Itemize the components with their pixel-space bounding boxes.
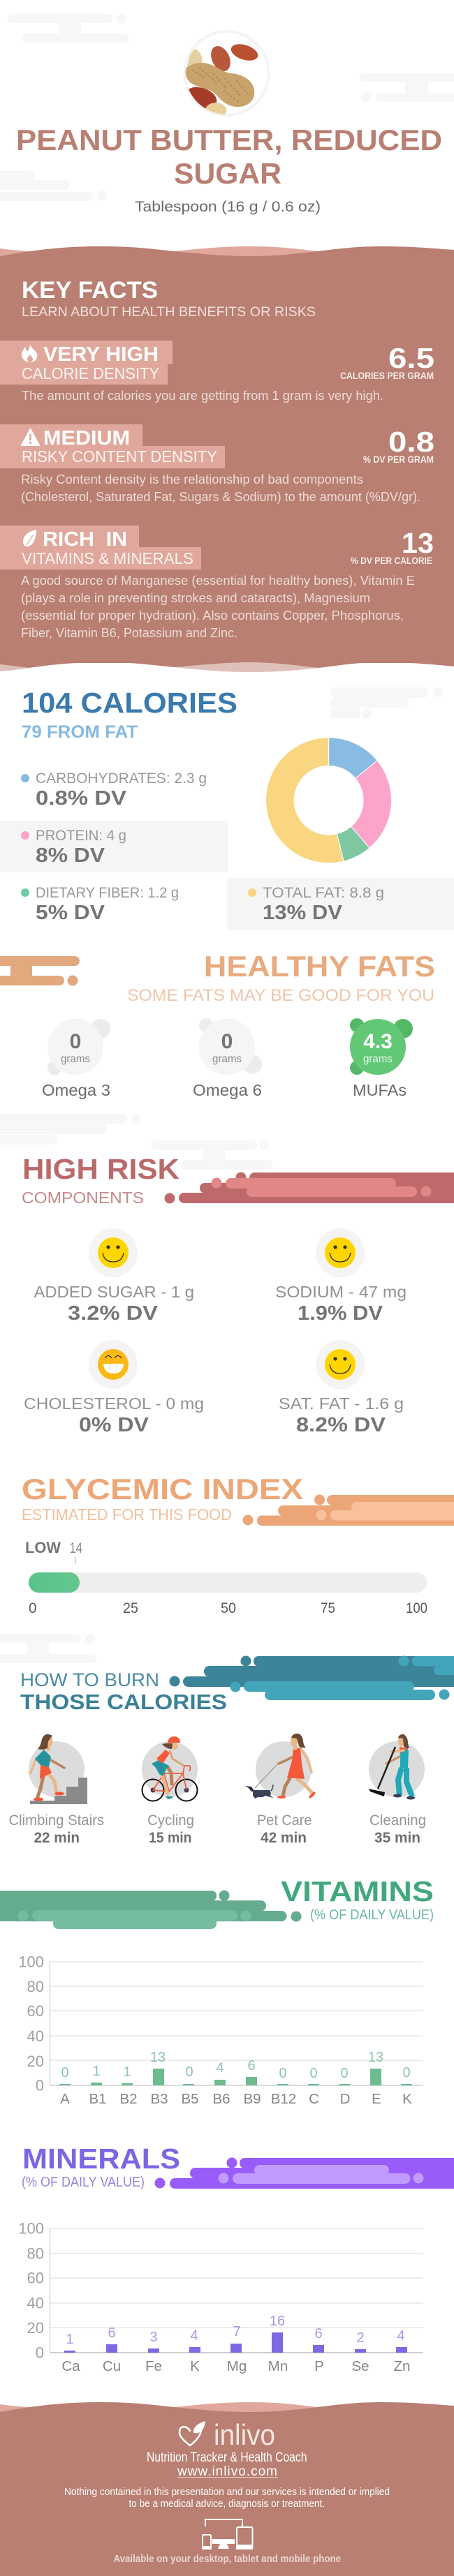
chart: vitamins bar chart: 0	[340, 2066, 349, 2081]
chart: vitamins bar chart: 0	[279, 2066, 287, 2081]
chart: minerals bar chart: P	[314, 2358, 324, 2374]
icon: leaf	[23, 530, 36, 546]
label: VITAMINS & MINERALS	[22, 549, 193, 567]
item: sodium	[275, 1228, 407, 1325]
legend: carbohydrates	[21, 770, 207, 810]
chart: minerals bar chart: 40	[27, 2295, 44, 2311]
chart: minerals bar chart: Mn	[268, 2358, 288, 2374]
chart: vitamins bar chart: 100	[18, 1953, 44, 1971]
chart: vitamins bar chart: 1	[92, 2064, 101, 2079]
panel: footer	[0, 2402, 454, 2576]
panel: high risk components	[22, 1153, 454, 1436]
heading: how to burn: HOW TO BURN	[20, 1669, 159, 1690]
gauge: glycemic index bar	[29, 1556, 427, 1593]
icon: smiley	[325, 1349, 356, 1380]
gauge scale: 25	[123, 1600, 138, 1616]
chart: vitamins bar chart: A	[60, 2091, 70, 2107]
description: (plays a role in preventing strokes and cataracts), Magnesium	[21, 590, 370, 605]
chart: minerals bar chart: Cu	[103, 2358, 121, 2374]
item: cholesterol: CHOLESTEROL - 0 mg	[24, 1394, 204, 1413]
header: food title and image	[16, 31, 442, 215]
value: 6.5	[388, 342, 434, 374]
description: (Cholesterol, Saturated Fat, Sugars & Sodium) to the amount (%DV/gr).	[21, 489, 420, 504]
chart: vitamins bar chart: B12	[271, 2091, 296, 2107]
activity: cleaning	[369, 1734, 426, 1846]
gauge scale: 100	[406, 1600, 427, 1616]
stat: omega 6: Omega 6	[193, 1081, 262, 1099]
legend: total fat: TOTAL FAT: 8.8 g	[263, 885, 384, 901]
chart: minerals bar chart: Se	[351, 2358, 369, 2374]
chart: minerals bar chart: Ca	[61, 2358, 80, 2374]
icon: woman climbing stairs	[30, 1734, 87, 1804]
chart: minerals bar chart: 100	[18, 2219, 44, 2238]
chart: minerals bar chart: 4	[397, 2328, 405, 2344]
disclaimer: Nothing contained in this presentation and our services is intended or implied	[64, 2486, 390, 2498]
chart: vitamins bar chart: 80	[27, 1978, 44, 1995]
tagline: Nutrition Tracker & Health Coach	[147, 2450, 307, 2465]
chart: vitamins bar chart: B6	[212, 2091, 230, 2107]
value: 14: 14	[70, 1540, 82, 1556]
icon: woman walking dog	[245, 1734, 316, 1799]
panel: calories	[0, 687, 454, 930]
title: PEANUT BUTTER, REDUCED	[16, 124, 442, 156]
activity: cleaning: 35 min	[374, 1830, 420, 1846]
stat: omega 3: grams	[61, 1053, 90, 1065]
decoration: red stripes	[165, 1172, 454, 1203]
subheading: components: COMPONENTS	[22, 1189, 144, 1207]
chart: vitamins bar chart: 0	[402, 2065, 411, 2080]
stat: omega 6: 0	[221, 1030, 233, 1053]
label: RISKY CONTENT DENSITY	[22, 447, 217, 466]
fact: calorie density	[0, 341, 434, 403]
logo: inlivo: inlivo	[214, 2418, 275, 2451]
fact: risky content density	[0, 424, 434, 504]
item: added sugar	[34, 1228, 194, 1325]
chart: vitamins bar chart: 0	[61, 2065, 69, 2080]
chart: minerals bar chart: 16	[270, 2314, 285, 2329]
icon: peanut photo in ring	[183, 31, 268, 118]
chart: vitamins bar chart: 4	[216, 2060, 224, 2076]
activity: pet care: Pet Care	[257, 1812, 312, 1829]
chart: vitamins bar chart: 13	[368, 2050, 383, 2065]
decoration: teal stripes	[169, 1655, 454, 1700]
chart: minerals bar chart: 6	[314, 2326, 323, 2342]
panel: minerals	[18, 2143, 454, 2374]
legend: dietary fiber	[21, 885, 179, 924]
chart: minerals bar chart: Fe	[145, 2358, 162, 2374]
legend: protein	[0, 821, 228, 872]
heading: those calories: THOSE CALORIES	[20, 1690, 227, 1714]
chart: vitamins bar chart: 13	[150, 2050, 166, 2065]
stat: mufas: grams	[363, 1053, 393, 1065]
panel: how to burn those calories	[8, 1655, 454, 1846]
stat: omega 3	[42, 1019, 110, 1099]
item: cholesterol	[24, 1340, 204, 1436]
chart: minerals bar chart: 3	[149, 2330, 158, 2345]
heading: glycemic index: GLYCEMIC INDEX	[22, 1473, 303, 1505]
gauge scale: 75	[321, 1600, 335, 1616]
subheading: SOME FATS MAY BE GOOD FOR YOU	[127, 986, 434, 1005]
heading: 104 calories: 104 CALORIES	[22, 687, 237, 719]
availability note: Available on your desktop, tablet and mobile phone	[113, 2554, 341, 2565]
activity: cleaning: Cleaning	[369, 1812, 426, 1829]
unit: % DV PER GRAM	[363, 454, 434, 465]
activity: pet care	[245, 1734, 316, 1846]
panel: key facts	[0, 246, 454, 672]
activity: pet care: 42 min	[261, 1830, 307, 1846]
activity: climbing stairs: 22 min	[34, 1830, 80, 1846]
fact: rich in vitamins and minerals	[0, 526, 434, 640]
chart: vitamins bar chart: 1	[123, 2064, 131, 2080]
activity: cycling: 15 min	[149, 1830, 191, 1846]
unit: CALORIES PER GRAM	[340, 371, 434, 381]
panel: vitamins	[0, 1875, 434, 2107]
heading: vitamins: VITAMINS	[281, 1875, 434, 1907]
decoration: purple stripes	[155, 2158, 454, 2189]
chart: minerals bar chart: 0	[36, 2344, 44, 2362]
description	[21, 573, 415, 640]
chart: vitamins bar chart: 20	[27, 2053, 44, 2070]
chart: vitamins bar chart: 60	[27, 2002, 44, 2020]
chart: minerals bar chart: Mg	[227, 2358, 247, 2374]
chart: vitamins bar chart: 40	[27, 2027, 44, 2045]
decoration: orange stripes	[0, 956, 80, 985]
icon: warning triangle	[22, 429, 39, 445]
chart: vitamins bar chart: B5	[181, 2091, 199, 2107]
logo: inlivo	[180, 2418, 275, 2451]
chart: macronutrient donut	[266, 738, 392, 863]
stat: omega 6	[193, 1018, 262, 1099]
chart: vitamins bar chart: K	[402, 2091, 412, 2107]
gauge scale: 0	[29, 1600, 36, 1616]
chart: minerals bar chart: 80	[27, 2244, 44, 2263]
description: Risky Content density is the relationship of bad components	[21, 472, 363, 486]
stat: omega 6: grams	[212, 1053, 242, 1065]
disclaimer	[64, 2486, 390, 2510]
heading: high risk: HIGH RISK	[22, 1153, 180, 1185]
unit: % DV PER CALORIE	[351, 556, 432, 566]
description: The amount of calories you are getting from 1 gram is very high.	[22, 388, 383, 403]
disclaimer: to be a medical advice, diagnosis or treatment.	[129, 2498, 325, 2510]
legend: carbohydrates: 0.8% DV	[36, 787, 127, 810]
chart: vitamins bar chart	[18, 1953, 423, 2107]
chart: vitamins bar chart: 0	[36, 2077, 44, 2094]
icon: devices	[202, 2519, 253, 2549]
serving size: Tablespoon (16 g / 0.6 oz)	[135, 199, 321, 215]
chart: vitamins bar chart: D	[340, 2091, 350, 2107]
item: added sugar: 3.2% DV	[68, 1302, 159, 1325]
chart: minerals bar chart	[18, 2219, 423, 2374]
chart: minerals bar chart: K	[190, 2358, 200, 2374]
item: saturated fat	[279, 1340, 404, 1436]
icon: flame	[22, 344, 37, 362]
chart: vitamins bar chart: 0	[309, 2066, 318, 2081]
chart: minerals bar chart: 20	[27, 2319, 44, 2337]
legend: protein: PROTEIN: 4 g	[36, 828, 126, 844]
chart: minerals bar chart: 60	[27, 2270, 44, 2286]
title line two: SUGAR	[174, 157, 281, 190]
chart: vitamins bar chart: B1	[89, 2091, 107, 2107]
subheading: percent of daily value: (% OF DAILY VALUE)	[310, 1907, 434, 1923]
stat: mufas: MUFAs	[353, 1081, 407, 1099]
description: Fiber, Vitamin B6, Potassium and Zinc.	[21, 625, 237, 640]
subheading: from fat: 79 FROM FAT	[22, 722, 138, 742]
chart: vitamins bar chart: B3	[150, 2091, 168, 2107]
subheading: LEARN ABOUT HEALTH BENEFITS OR RISKS	[22, 305, 316, 320]
item: sodium: 1.9% DV	[298, 1302, 383, 1325]
chart: vitamins bar chart: 0	[185, 2064, 193, 2080]
icon: grinning face	[98, 1349, 129, 1380]
legend: dietary fiber: DIETARY FIBER: 1.2 g	[36, 885, 179, 901]
decoration: orange stripes	[243, 1495, 454, 1526]
heading: minerals: MINERALS	[22, 2143, 180, 2175]
panel: healthy fats	[0, 950, 435, 1099]
gauge scale	[29, 1600, 427, 1616]
panel: glycemic index	[22, 1473, 454, 1616]
subheading: ESTIMATED FOR THIS FOOD	[22, 1505, 232, 1524]
chart: minerals bar chart: 1	[66, 2332, 74, 2347]
chart: minerals bar chart: 4	[190, 2328, 198, 2344]
rating: VERY HIGH	[43, 343, 159, 366]
activity: climbing stairs	[8, 1734, 104, 1846]
legend: protein: 8% DV	[36, 844, 105, 867]
chart: vitamins bar chart: E	[372, 2091, 381, 2107]
legend: total fat: 13% DV	[263, 902, 343, 924]
value: 0.8	[388, 426, 434, 458]
website link: www.inlivo.com	[177, 2464, 277, 2479]
activity: cycling: Cycling	[147, 1812, 194, 1829]
description: (essential for proper hydration). Also contains Copper, Phosphorus,	[21, 608, 404, 623]
item: sodium: SODIUM - 47 mg	[275, 1283, 407, 1301]
chart: minerals bar chart: 7	[233, 2324, 241, 2339]
value: 13	[402, 527, 434, 559]
item: cholesterol: 0% DV	[79, 1414, 149, 1436]
icon: smiley	[325, 1237, 356, 1268]
legend: carbohydrates: CARBOHYDRATES: 2.3 g	[36, 770, 207, 787]
stat: omega 3: Omega 3	[42, 1081, 110, 1099]
gauge scale: 50	[221, 1600, 236, 1616]
item: saturated fat: 8.2% DV	[296, 1414, 386, 1436]
icon: woman cycling	[142, 1736, 197, 1801]
subheading: percent of daily value: (% OF DAILY VALUE)	[22, 2175, 145, 2190]
description: A good source of Manganese (essential for healthy bones), Vitamin E	[21, 573, 415, 588]
label: CALORIE DENSITY	[22, 364, 159, 382]
stat: omega 3: 0	[70, 1030, 81, 1053]
stat: mufas: 4.3	[363, 1030, 393, 1053]
item: added sugar: ADDED SUGAR - 1 g	[34, 1283, 194, 1301]
rating: MEDIUM	[43, 427, 130, 449]
legend: total fat	[227, 878, 454, 930]
activity: climbing stairs: Climbing Stairs	[8, 1812, 104, 1829]
activity: cycling	[142, 1736, 198, 1846]
description	[21, 472, 420, 504]
decoration: green stripes	[0, 1890, 302, 1929]
chart: vitamins bar chart: B9	[243, 2091, 261, 2107]
heading: healthy fats: HEALTHY FATS	[204, 950, 435, 983]
heading: key facts: KEY FACTS	[22, 277, 158, 304]
chart: vitamins bar chart: 6	[247, 2058, 256, 2074]
rating: low: LOW	[25, 1539, 61, 1556]
legend: dietary fiber: 5% DV	[36, 902, 105, 924]
stat: mufas	[350, 1018, 413, 1099]
item: saturated fat: SAT. FAT - 1.6 g	[279, 1394, 404, 1413]
icon: woman sweeping	[369, 1734, 415, 1799]
chart: minerals bar chart: 2	[356, 2330, 365, 2346]
chart: minerals bar chart: Zn	[394, 2358, 410, 2374]
chart: minerals bar chart: 6	[108, 2325, 116, 2341]
chart: vitamins bar chart: B2	[119, 2091, 138, 2107]
rating: RICH IN	[43, 528, 127, 551]
icon: smiley	[98, 1237, 129, 1268]
chart: vitamins bar chart: C	[309, 2091, 319, 2107]
